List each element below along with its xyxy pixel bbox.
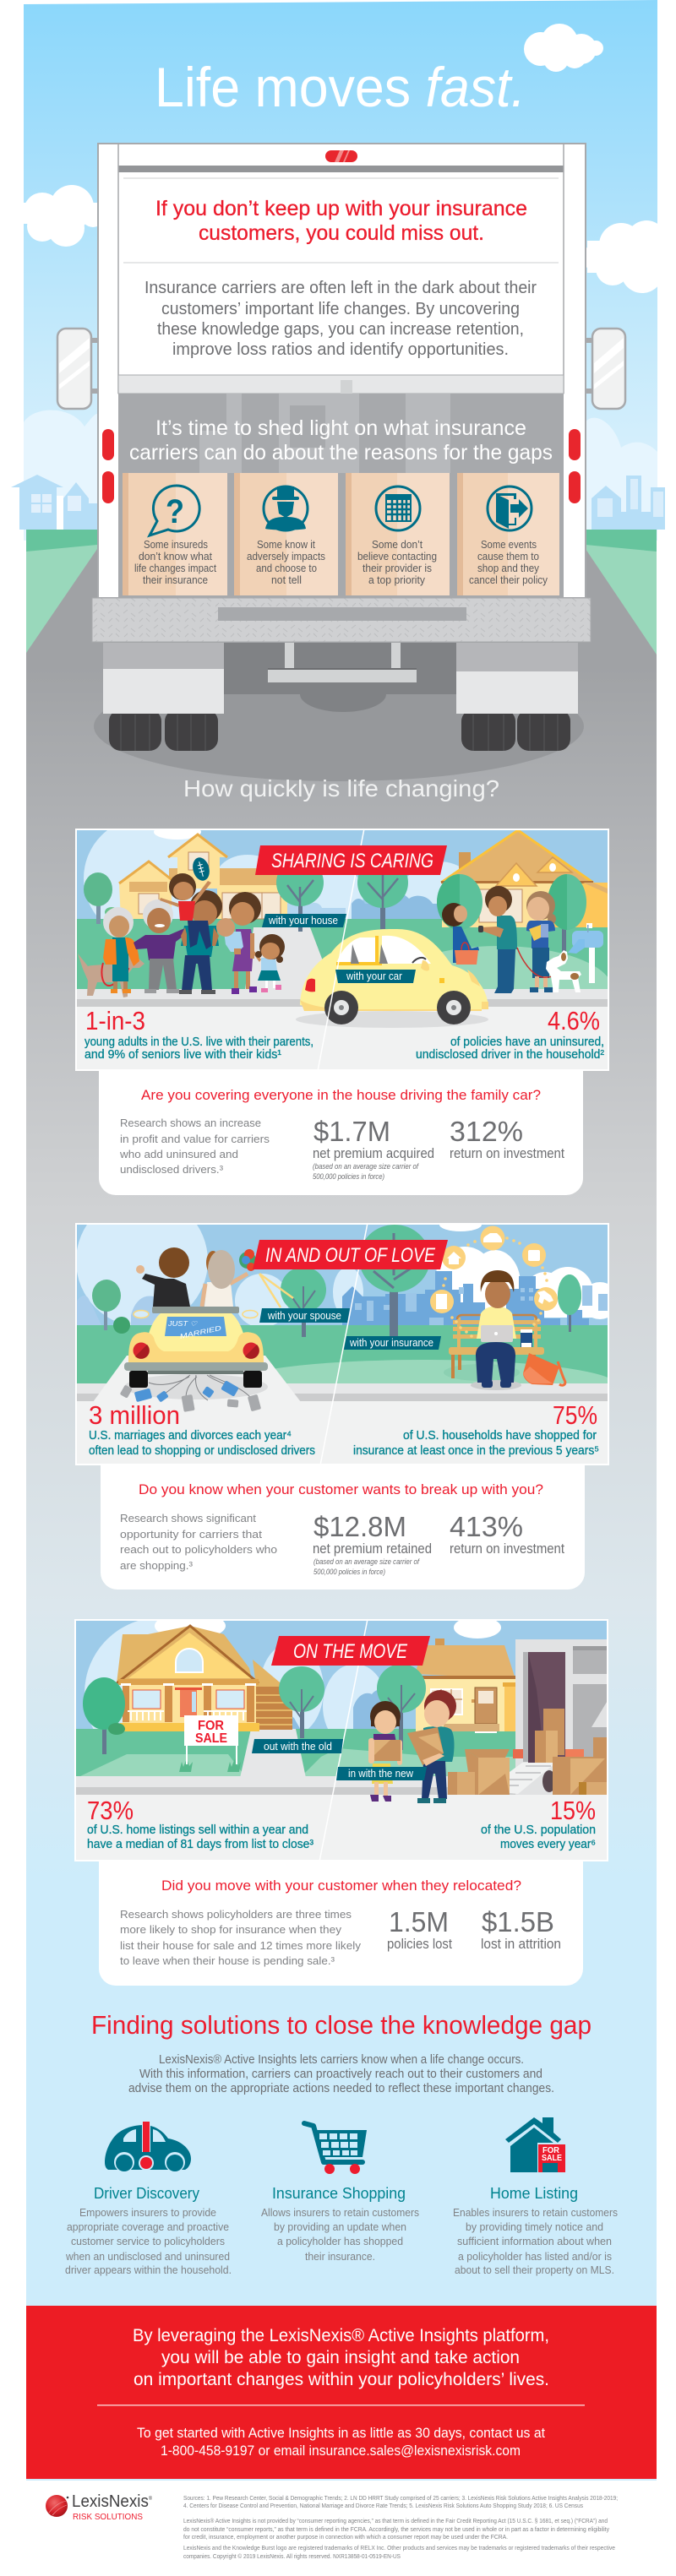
stat: 73% bbox=[87, 1796, 313, 1851]
tree bbox=[377, 1664, 426, 1750]
background right: cloud bbox=[581, 220, 667, 293]
child on shoulders bbox=[160, 873, 211, 949]
banner: on the move: ON THE MOVE bbox=[293, 1640, 408, 1663]
football bbox=[193, 857, 210, 881]
truck body bbox=[98, 144, 586, 598]
leash bbox=[516, 948, 551, 978]
new house bbox=[415, 1639, 515, 1733]
research text: more likely to shop for insurance when they bbox=[120, 1923, 342, 1936]
truck door bbox=[119, 172, 563, 375]
intro paragraph: these knowledge gaps, you can increase retention, bbox=[157, 320, 524, 339]
metric: 413%: return on investment bbox=[450, 1541, 564, 1557]
research text: reach out to policyholders who bbox=[120, 1543, 277, 1556]
icon: house for sale: FOR bbox=[542, 2146, 560, 2155]
metric: 413% bbox=[450, 1511, 564, 1557]
gaps heading: carriers can do about the reasons for the gaps bbox=[129, 441, 553, 465]
card: not a priority bbox=[346, 473, 450, 595]
stat: 73%: of U.S. home listings sell within a year and bbox=[87, 1823, 308, 1837]
research text: who add uninsured and bbox=[119, 1148, 238, 1160]
panel: sharing is caring bbox=[75, 818, 613, 1195]
stat: 75% bbox=[353, 1400, 599, 1458]
tin cans bbox=[120, 1375, 261, 1412]
grass tufts bbox=[179, 1758, 241, 1772]
logo bbox=[46, 2492, 153, 2522]
research text: list their house for sale and 12 times more likely bbox=[120, 1939, 362, 1952]
stat: 1-in-3: 1-in-3 bbox=[85, 1006, 145, 1035]
solutions intro: With this information, carriers can proactively reach out to their customers and bbox=[139, 2068, 542, 2081]
metric: $1.7M: net premium acquired bbox=[313, 1146, 434, 1161]
grandmother bbox=[103, 907, 139, 993]
stat: 3 million: 3 million bbox=[89, 1400, 180, 1430]
stat: 75%: insurance at least once in the previous 5 years⁵ bbox=[353, 1444, 599, 1458]
research text: undisclosed drivers.³ bbox=[120, 1163, 224, 1176]
white dog bbox=[546, 950, 581, 992]
man on bench with laptop bbox=[444, 1270, 544, 1390]
reflector lights bbox=[102, 429, 581, 503]
man with keys bbox=[478, 886, 517, 993]
logo: LexisNexis bbox=[72, 2492, 154, 2511]
low right cloud bbox=[586, 418, 657, 530]
stat: 3 million bbox=[89, 1400, 315, 1458]
solution text: driver appears within the household. bbox=[65, 2264, 232, 2276]
logo: RISK SOLUTIONS bbox=[73, 2512, 143, 2522]
baby bbox=[216, 918, 243, 954]
stat: 1-in-3: and 9% of seniors live with their kids¹ bbox=[84, 1048, 281, 1062]
solutions intro: LexisNexis® Active Insights lets carriers know when a life change occurs. bbox=[159, 2053, 524, 2067]
solution: insurance shopping bbox=[261, 2123, 419, 2263]
grass right bbox=[586, 530, 657, 655]
for sale sign bbox=[184, 1715, 238, 1764]
illustration: family and car bbox=[75, 818, 613, 1071]
research text bbox=[119, 1117, 270, 1176]
card text: believe contacting bbox=[357, 550, 437, 562]
card text: don’t know what bbox=[139, 550, 212, 562]
yellow car bbox=[296, 929, 488, 1028]
metric: $12.8M: net premium retained bbox=[313, 1541, 432, 1557]
panel: in and out of love bbox=[75, 1195, 626, 1590]
stat: 15%: moves every year⁶ bbox=[500, 1838, 596, 1851]
card text: their insurance bbox=[143, 573, 208, 586]
contact details bbox=[137, 2425, 545, 2459]
truck back bbox=[92, 144, 591, 751]
stat: 4.6%: of policies have an uninsured, bbox=[450, 1035, 604, 1049]
solution text bbox=[65, 2206, 232, 2276]
metric: 312% bbox=[450, 1116, 564, 1161]
metric: 1.5M bbox=[387, 1906, 452, 1952]
contact details: 1-800-458-9197 or email insurance.sales@lexisnexisrisk.com bbox=[161, 2443, 521, 2459]
card text: their provider is bbox=[363, 562, 432, 574]
research text bbox=[120, 1908, 362, 1967]
solution title: Driver Discovery bbox=[94, 2185, 199, 2202]
divider line bbox=[318, 829, 364, 1071]
truck undercarriage bbox=[224, 643, 456, 712]
metric: $1.5B: $1.5B bbox=[482, 1906, 554, 1937]
research text: Research shows an increase bbox=[120, 1117, 261, 1129]
banner: sharing is caring bbox=[255, 845, 447, 875]
sky background bbox=[24, 0, 657, 541]
panel frame bbox=[75, 1620, 608, 1861]
sources and legal: LexisNexis® Active Insights is not provided by “consumer reporting agencies,” as that term is defined in the Fair Credit Reporting Act (15 U.S.C. § 1681, et seq.) (“FCRA”) and bbox=[183, 2518, 608, 2524]
card question: Do you know when your customer wants to break up with you? bbox=[139, 1481, 543, 1497]
intro paragraph: improve loss ratios and identify opportunities. bbox=[172, 340, 509, 359]
door handle band bbox=[118, 375, 564, 422]
divider line bbox=[320, 1223, 368, 1465]
research text: are shopping.³ bbox=[120, 1559, 194, 1572]
solution text bbox=[261, 2206, 419, 2263]
label: with your insurance: with your insurance bbox=[349, 1336, 433, 1349]
stat: 4.6% bbox=[416, 1006, 604, 1062]
icon: spy bbox=[264, 486, 308, 530]
solution text: appropriate coverage and proactive bbox=[67, 2220, 229, 2233]
wedding car rear: JUST ♡ bbox=[167, 1320, 198, 1328]
metric: $12.8M bbox=[313, 1511, 432, 1576]
stat: 4.6%: undisclosed driver in the household² bbox=[416, 1048, 604, 1062]
research text bbox=[120, 1512, 277, 1572]
metric: $12.8M: (based on an average size carrier of bbox=[313, 1557, 420, 1566]
solution text: Enables insurers to retain customers bbox=[453, 2206, 618, 2219]
card text: life changes impact bbox=[134, 562, 216, 574]
icon: exit door bbox=[488, 486, 532, 530]
solution text: sufficient information about when bbox=[457, 2235, 612, 2247]
truck cargo interior bbox=[118, 394, 564, 597]
headline: If you don’t keep up with your insurance bbox=[155, 197, 527, 220]
sources and legal bbox=[183, 2496, 618, 2560]
card text: not tell bbox=[271, 573, 302, 586]
mud flaps bbox=[103, 643, 578, 714]
card text bbox=[469, 538, 548, 586]
closing statement bbox=[133, 2326, 549, 2389]
card text: cancel their policy bbox=[469, 573, 548, 586]
card text: Some events bbox=[481, 538, 537, 551]
road shadow under truck bbox=[94, 671, 584, 781]
panel: on the move bbox=[74, 1612, 608, 1986]
icon: car with alert bbox=[105, 2122, 191, 2172]
truck top lamp bbox=[325, 150, 357, 162]
panel frame bbox=[76, 1224, 608, 1465]
solutions intro bbox=[128, 2053, 554, 2095]
illustration: house for sale and moving couple bbox=[74, 1612, 608, 1861]
tires bbox=[109, 709, 570, 751]
stat: 73%: 73% bbox=[87, 1796, 134, 1825]
stat: 15%: 15% bbox=[550, 1796, 596, 1825]
card text bbox=[247, 538, 325, 586]
metric: 312%: 312% bbox=[450, 1116, 523, 1147]
grandfather bbox=[134, 899, 189, 993]
icon: shopping cart bbox=[304, 2123, 367, 2174]
card question: Are you covering everyone in the house driving the family car? bbox=[141, 1087, 541, 1103]
label: with your spouse: with your spouse bbox=[267, 1309, 341, 1322]
white stats card bbox=[101, 1465, 585, 1590]
metric: $1.5B: lost in attrition bbox=[481, 1937, 561, 1952]
card text: a top priority bbox=[368, 573, 425, 586]
bumper bbox=[92, 598, 591, 642]
road and page background bbox=[26, 530, 657, 2481]
card text: cause them to bbox=[477, 550, 539, 562]
research text: to leave when their house is pending sale.³ bbox=[120, 1954, 335, 1967]
solution text bbox=[453, 2206, 618, 2276]
solution text: Empowers insurers to provide bbox=[79, 2206, 216, 2219]
sources and legal: LexisNexis and the Knowledge Burst logo are registered trademarks of RELX Inc. Other products and services may be trademarks or registered trademarks of their respective bbox=[183, 2546, 615, 2552]
section heading: How quickly is life changing? bbox=[183, 775, 499, 802]
solution text: by providing timely notice and bbox=[466, 2220, 603, 2233]
closing statement: you will be able to gain insight and take action bbox=[161, 2348, 520, 2367]
sources and legal: do not constitute “consumer reports,” as that term is defined in the FCRA. Accordingly, the services may not be used in whole or in part as a factor in determining eligibility bbox=[183, 2527, 609, 2533]
metric: $12.8M: 500,000 policies in force) bbox=[313, 1568, 385, 1576]
messenger bag bbox=[523, 1353, 565, 1385]
neighbours and dog bbox=[442, 886, 603, 993]
research text: Research shows policyholders are three times bbox=[120, 1908, 352, 1921]
intro paragraph: Insurance carriers are often left in the dark about their bbox=[144, 279, 537, 297]
sources and legal: Sources: 1. Pew Research Center, Social & Demographic Trends; 2. LN DD HRRT Study comprised of 25 carriers; 3. LexisNexis Risk Solutions Active Insights Analysis 2018-2019; bbox=[183, 2496, 618, 2502]
metric: 312%: return on investment bbox=[450, 1146, 564, 1161]
card: choose not to tell bbox=[234, 473, 338, 595]
stat: 15% bbox=[481, 1796, 596, 1851]
stat: 4.6%: 4.6% bbox=[548, 1006, 600, 1035]
banner: in and out of love bbox=[253, 1240, 448, 1269]
red call to action bbox=[26, 2306, 657, 2479]
top right cloud bbox=[524, 24, 603, 72]
headline bbox=[155, 197, 527, 245]
gaps heading: It’s time to shed light on what insurance bbox=[155, 416, 526, 440]
intro paragraph bbox=[144, 279, 537, 359]
solution text: a policyholder has listed and/or is bbox=[458, 2250, 612, 2263]
solution: home listing bbox=[453, 2117, 618, 2276]
card text: shop and they bbox=[477, 562, 539, 574]
icon: house for sale bbox=[505, 2117, 565, 2172]
girl with papers bbox=[526, 891, 556, 992]
metric: $1.5B bbox=[481, 1906, 561, 1952]
white stats card bbox=[99, 1071, 583, 1195]
low left cloud bbox=[24, 410, 97, 530]
trees bbox=[83, 1666, 324, 1754]
stat: 73%: have a median of 81 days from list to close³ bbox=[87, 1838, 313, 1851]
contact details: To get started with Active Insights in as little as 30 days, contact us at bbox=[137, 2425, 545, 2441]
metric: 1.5M: policies lost bbox=[387, 1937, 452, 1952]
stat: 3 million: U.S. marriages and divorces each year⁴ bbox=[89, 1429, 292, 1443]
banner: on the move bbox=[271, 1636, 430, 1666]
icon: question bubble bbox=[150, 486, 199, 535]
right mirror bbox=[586, 329, 625, 409]
closing statement: on important changes within your policyholders’ lives. bbox=[134, 2370, 549, 2389]
mother bbox=[229, 892, 261, 994]
solution text: customer service to policyholders bbox=[71, 2235, 225, 2247]
logo: ® bbox=[149, 2496, 153, 2502]
woman with bag bbox=[442, 903, 479, 965]
metric: $1.7M bbox=[313, 1116, 434, 1181]
house for sale bbox=[117, 1626, 292, 1731]
stat: 3 million: often lead to shopping or undisclosed drivers bbox=[89, 1444, 315, 1458]
label: in with the new: in with the new bbox=[348, 1767, 414, 1780]
label: with your house: with your house bbox=[268, 914, 338, 927]
solution text: a policyholder has shopped bbox=[277, 2235, 403, 2247]
left town houses bbox=[11, 475, 97, 530]
metric: $1.7M: $1.7M bbox=[313, 1116, 390, 1147]
stat: 75%: of U.S. households have shopped for bbox=[403, 1429, 597, 1443]
solution text: by providing an update when bbox=[274, 2220, 406, 2233]
card text: Some know it bbox=[257, 538, 315, 551]
icon: calendar bbox=[376, 486, 420, 530]
trees bbox=[92, 1225, 581, 1337]
intro paragraph: customers’ important life changes. By uncovering bbox=[161, 300, 520, 318]
metric: 1.5M: 1.5M bbox=[389, 1906, 449, 1937]
solution text: Allows insurers to retain customers bbox=[261, 2206, 419, 2219]
wedding car rear: MARRIED bbox=[179, 1324, 222, 1340]
sources and legal: 4. Centers for Disease Control and Prevention, National Marriage and Divorce Rate Trends; 5. LexisNexis Risk Solutions Auto Shopping Study 2018; 6. US Census bbox=[183, 2503, 583, 2509]
card text bbox=[357, 538, 437, 586]
life event icons bbox=[430, 1226, 558, 1338]
dog bbox=[78, 954, 144, 997]
headline: customers, you could miss out. bbox=[199, 221, 484, 245]
left mirror bbox=[57, 329, 98, 409]
solutions heading: Finding solutions to close the knowledge gap bbox=[91, 2010, 592, 2040]
card question: Did you move with your customer when they relocated? bbox=[161, 1878, 521, 1894]
moving truck bbox=[484, 1639, 608, 1795]
mailbox bbox=[568, 923, 603, 983]
right house bbox=[441, 830, 608, 927]
stacked boxes bbox=[448, 1709, 608, 1795]
card: unaware insureds bbox=[123, 473, 227, 595]
metric: $12.8M: $12.8M bbox=[313, 1511, 406, 1542]
white stats card bbox=[99, 1861, 583, 1986]
trees bbox=[84, 872, 586, 953]
stat: 75%: 75% bbox=[553, 1400, 597, 1430]
gaps heading bbox=[129, 416, 553, 465]
for sale sign: SALE bbox=[195, 1731, 227, 1746]
card text: and choose to bbox=[256, 562, 317, 574]
stat: 1-in-3 bbox=[84, 1006, 313, 1062]
research text: in profit and value for carriers bbox=[120, 1133, 270, 1145]
research text: Research shows significant bbox=[120, 1512, 256, 1524]
right town buildings bbox=[592, 476, 665, 530]
sources and legal: for credit, insurance, employment or another purpose in connection with which a consumer report may be used under the FCRA. bbox=[183, 2535, 508, 2541]
solutions intro: advise them on the appropriate actions needed to reflect these important changes. bbox=[128, 2082, 554, 2095]
solution text: when an undisclosed and uninsured bbox=[65, 2250, 230, 2263]
background left: cloud bbox=[24, 185, 105, 247]
couple bbox=[136, 1247, 293, 1307]
little girl bbox=[252, 934, 285, 992]
card text: adversely impacts bbox=[247, 550, 325, 562]
solution title: Insurance Shopping bbox=[272, 2185, 406, 2202]
icon: question bubble: ? bbox=[166, 493, 184, 530]
right tree over city bbox=[558, 1274, 581, 1315]
card text: Some insureds bbox=[144, 538, 208, 551]
sources and legal: companies. Copyright © 2019 LexisNexis. All rights reserved. NXR13858-01-0519-EN-US bbox=[183, 2553, 401, 2560]
card text bbox=[134, 538, 216, 586]
label: out with the old: out with the old bbox=[264, 1740, 332, 1753]
metric: 413%: 413% bbox=[450, 1511, 523, 1542]
illustration: newlyweds and shopper bbox=[77, 1225, 608, 1464]
truck door top bar bbox=[118, 166, 564, 172]
divider line bbox=[319, 1619, 368, 1861]
solution text: their insurance. bbox=[305, 2250, 375, 2263]
metric: $1.7M: (based on an average size carrier of bbox=[313, 1162, 419, 1171]
solution text: about to sell their property on MLS. bbox=[455, 2264, 614, 2276]
banner: sharing is caring: SHARING IS CARING bbox=[271, 850, 433, 872]
couple with boxes bbox=[368, 1690, 456, 1803]
card: cancel policy bbox=[457, 473, 559, 595]
grass left bbox=[26, 530, 97, 653]
wedding car rear bbox=[124, 1307, 268, 1399]
stat: 1-in-3: young adults in the U.S. live with their parents, bbox=[84, 1035, 313, 1049]
stat: 15%: of the U.S. population bbox=[481, 1823, 596, 1837]
for sale sign: FOR bbox=[198, 1719, 224, 1733]
father bbox=[179, 890, 222, 994]
metric: $1.7M: 500,000 policies in force) bbox=[313, 1172, 384, 1181]
solution title: Home Listing bbox=[490, 2185, 578, 2202]
solution: driver discovery bbox=[65, 2122, 232, 2276]
left house bbox=[119, 834, 287, 919]
label: with your car: with your car bbox=[346, 970, 403, 982]
card text: Some don’t bbox=[372, 538, 422, 551]
closing statement: By leveraging the LexisNexis® Active Insights platform, bbox=[133, 2326, 549, 2345]
panel frame bbox=[76, 829, 608, 1070]
family of seven bbox=[78, 856, 285, 997]
banner: in and out of love: IN AND OUT OF LOVE bbox=[265, 1244, 436, 1267]
title: Life moves fast. bbox=[155, 56, 526, 118]
icon: house for sale: SALE bbox=[542, 2154, 562, 2163]
research text: opportunity for carriers that bbox=[120, 1528, 262, 1541]
